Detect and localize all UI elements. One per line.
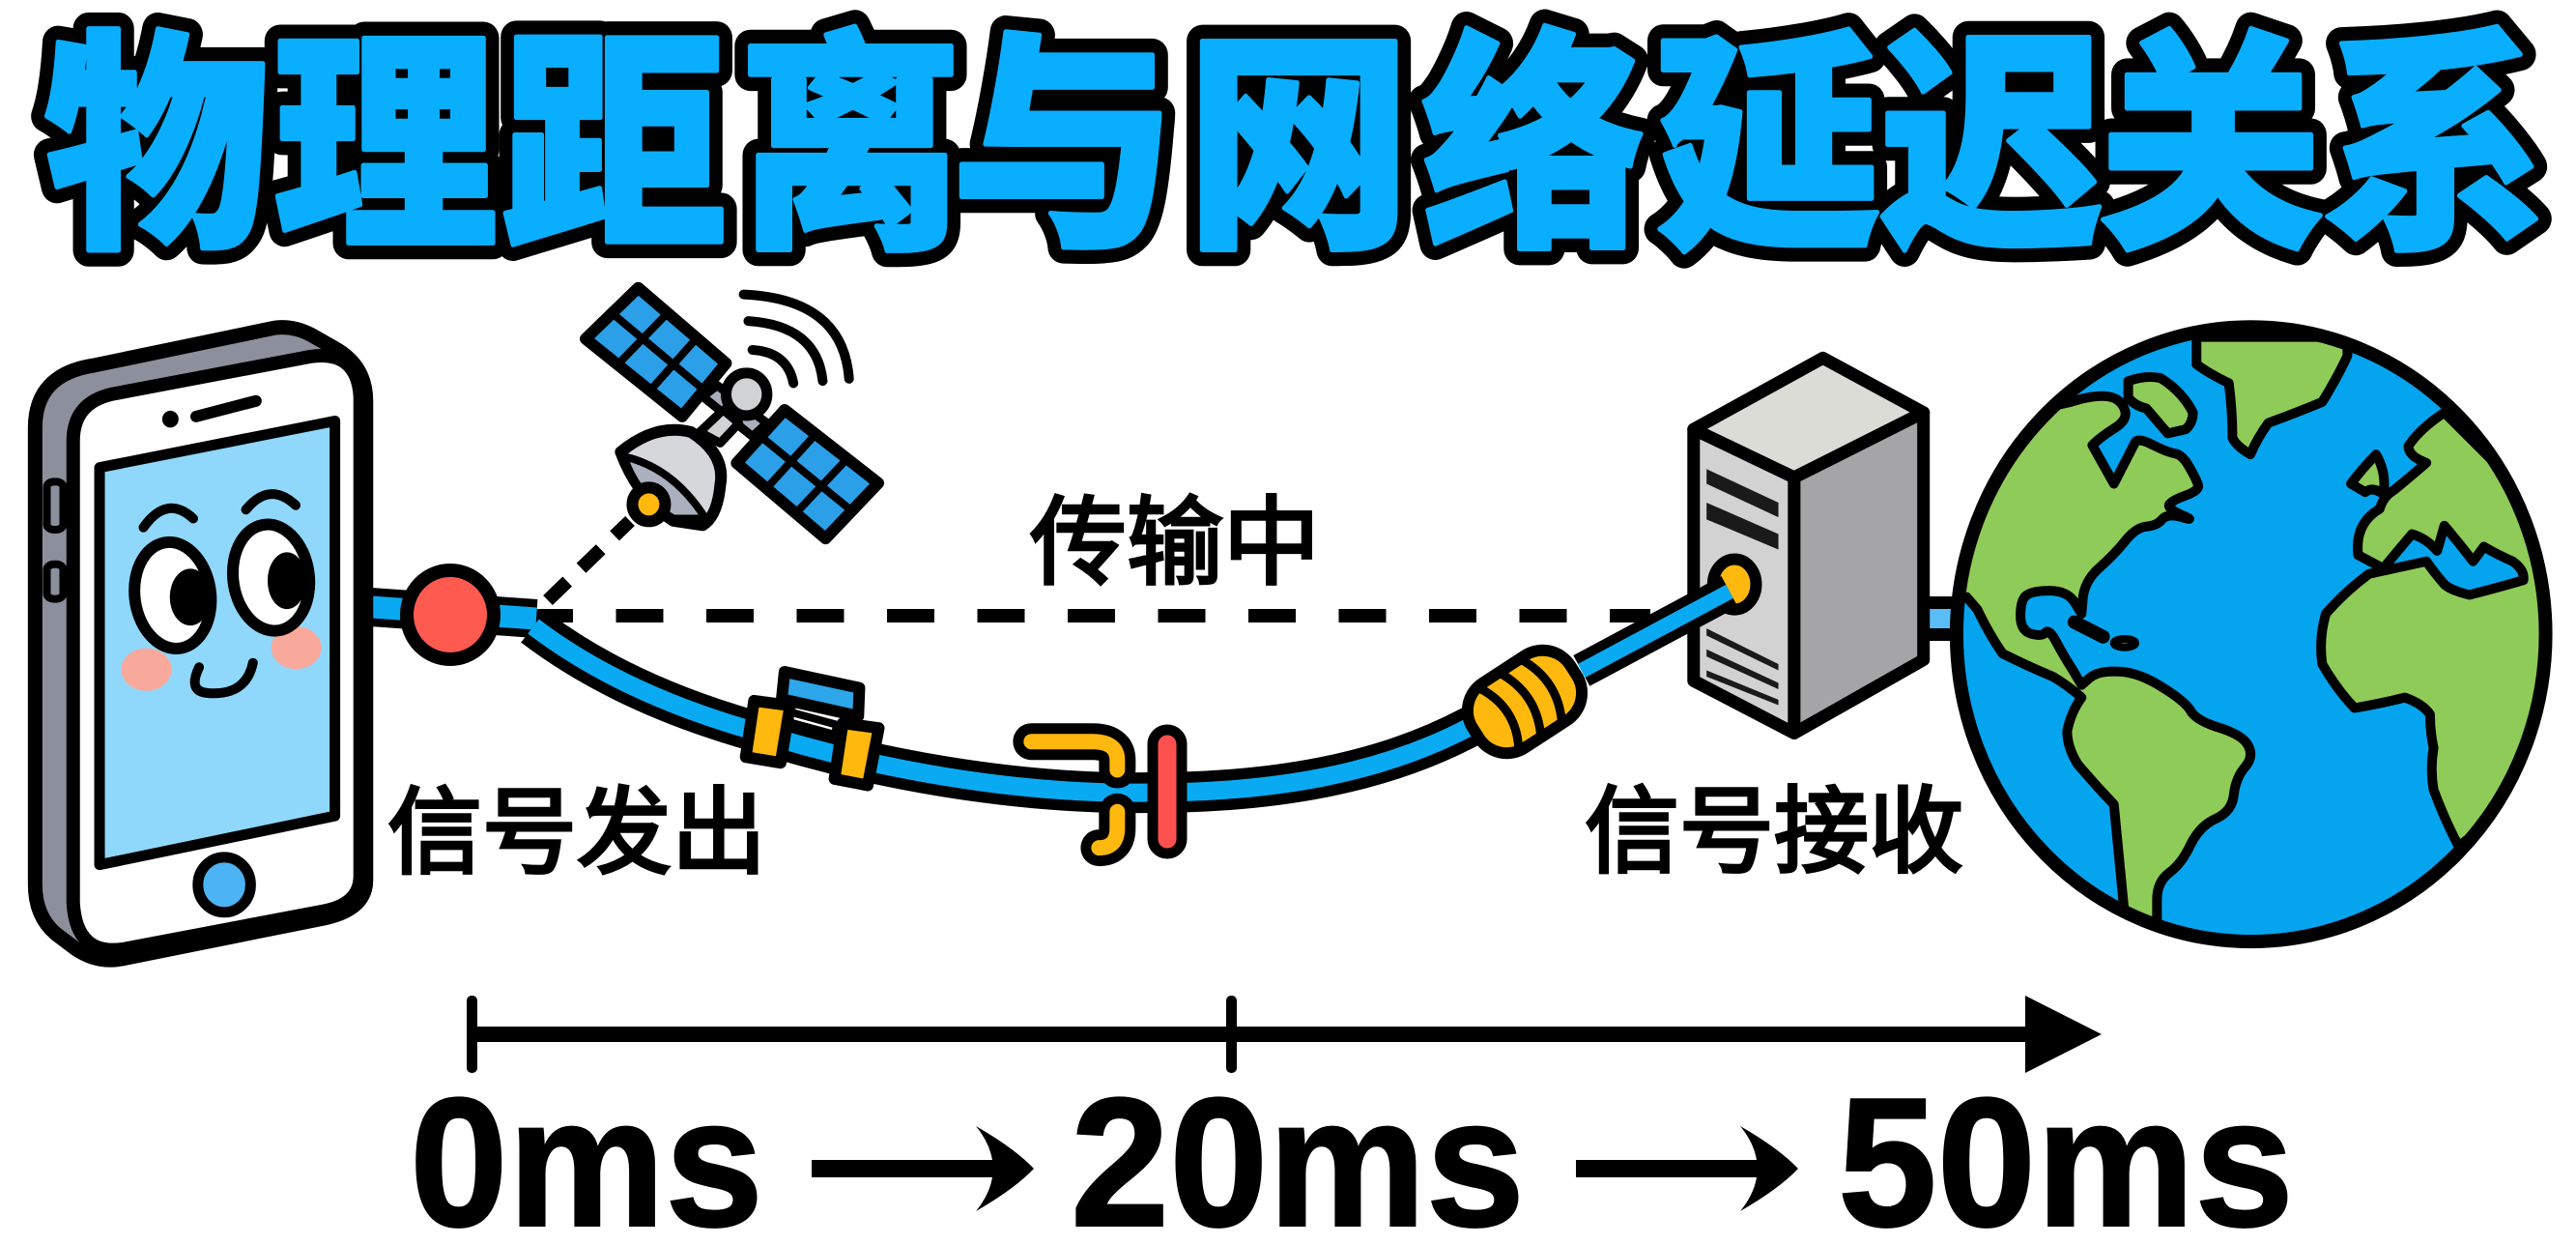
- phone speaker: [162, 401, 256, 427]
- solar panel lower: [736, 410, 878, 538]
- signal waves: [744, 295, 849, 383]
- icon: smartphone: [35, 328, 366, 960]
- continents: [1938, 337, 2570, 924]
- cable: server to globe: [1923, 596, 1971, 641]
- label: in transit: 传输中: [1030, 489, 1320, 597]
- title: 物理距离与网络延迟关系: [44, 18, 2547, 278]
- arrow 2: [1576, 1126, 1798, 1211]
- server port and cable end: [1582, 560, 1756, 671]
- icon: satellite: [586, 288, 878, 538]
- server front: [1694, 429, 1794, 734]
- icon: red signal node: [407, 570, 494, 659]
- label: signal sent: 信号发出: [387, 779, 766, 885]
- phone home button: [198, 857, 250, 912]
- timeline axis: [467, 996, 2102, 1073]
- satellite dish: [620, 430, 721, 525]
- phone front face: [73, 356, 360, 950]
- dashed line: transmission path: [526, 609, 1650, 622]
- solar panel upper: [586, 288, 726, 417]
- icon: server: [1582, 358, 1924, 734]
- satellite body: [700, 373, 767, 443]
- cable clamp connector: [746, 672, 879, 785]
- label: signal received: 信号接收: [1585, 778, 1963, 884]
- globe outline: [1957, 327, 2546, 941]
- phone side buttons: [46, 481, 63, 599]
- title: 物理距离与网络延迟关系: [44, 18, 2547, 278]
- cable: main curve: [533, 626, 1525, 793]
- cable coil: [1455, 638, 1594, 766]
- server vents: [1706, 469, 1779, 705]
- phone body: [35, 328, 366, 960]
- arrow 1: [812, 1126, 1034, 1211]
- ocean: [1957, 327, 2546, 941]
- icon: globe: [1938, 327, 2570, 941]
- phone screen: [100, 420, 335, 865]
- server top: [1694, 358, 1924, 478]
- dashed line: satellite link: [548, 521, 630, 600]
- cable: phone to node: [358, 606, 536, 619]
- server side: [1794, 413, 1924, 734]
- face: [121, 494, 322, 693]
- cable hook and red marker: [1031, 730, 1182, 854]
